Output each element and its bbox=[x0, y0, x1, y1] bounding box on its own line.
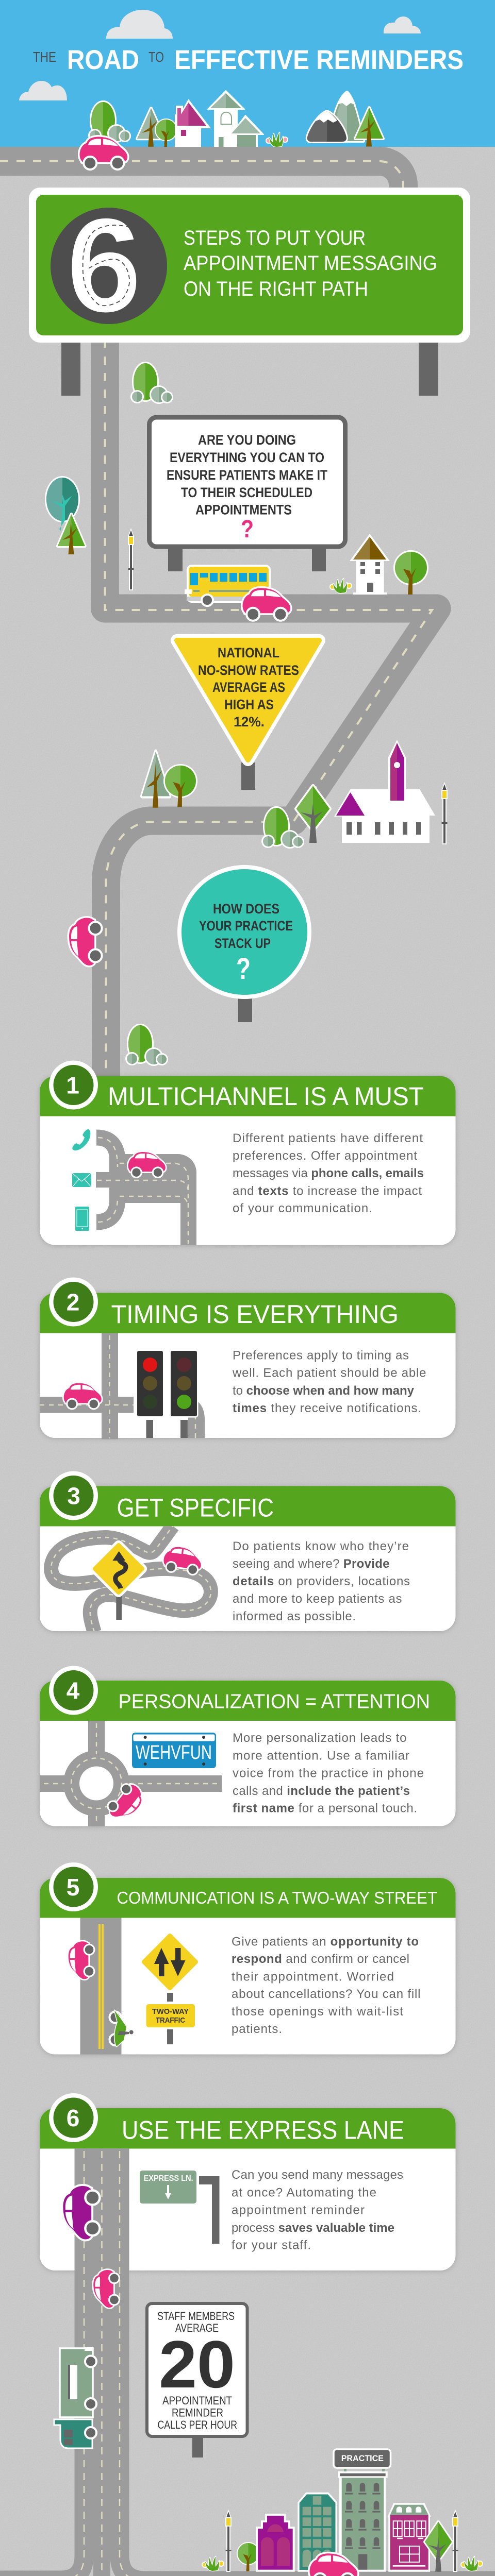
body text: respond and confirm or cancel bbox=[232, 1952, 409, 1966]
icon: mobile phone bbox=[75, 1207, 89, 1231]
speed sign: staff members average 20: 20 bbox=[159, 2327, 235, 2402]
mountains bbox=[307, 92, 364, 142]
two-way traffic sign bbox=[144, 1936, 196, 2044]
town scene bbox=[202, 2449, 483, 2572]
heading: TIMING IS EVERYTHING bbox=[111, 1300, 399, 1329]
pink car bbox=[69, 1941, 94, 1979]
title: TO bbox=[148, 49, 164, 65]
express lane sign bbox=[140, 2171, 220, 2244]
title bbox=[33, 45, 464, 75]
shrubs bbox=[127, 1025, 167, 1064]
trees near yield sign bbox=[142, 752, 329, 847]
street lamp bbox=[128, 529, 134, 590]
white house bbox=[208, 91, 263, 147]
billboard question bbox=[150, 417, 345, 571]
body text: Preferences apply to timing as bbox=[233, 1349, 409, 1362]
body text: voice from the practice in phone bbox=[233, 1766, 424, 1781]
body text: calls and include the patient’s bbox=[233, 1784, 410, 1798]
body text: informed as possible. bbox=[233, 1609, 356, 1623]
body text bbox=[232, 1935, 421, 2036]
body text: preferences. Offer appointment bbox=[233, 1149, 417, 1163]
pink car by bus bbox=[243, 588, 290, 621]
badge 1 bbox=[49, 1060, 98, 1110]
express roads and final road bbox=[0, 2148, 495, 2576]
license plate bbox=[132, 1733, 216, 1768]
badge 2 bbox=[49, 1278, 98, 1326]
traffic light: green bbox=[171, 1351, 197, 1438]
badge 4: 4 bbox=[67, 1677, 80, 1704]
purple building bbox=[256, 2514, 295, 2572]
lamp bbox=[441, 783, 448, 844]
badge 3: 3 bbox=[67, 1483, 80, 1510]
license plate: WEHVFUN bbox=[136, 1742, 212, 1764]
body text bbox=[232, 1349, 426, 1415]
body text bbox=[233, 1539, 410, 1623]
title: THE bbox=[33, 49, 56, 65]
body text bbox=[232, 2168, 403, 2252]
body text: patients. bbox=[232, 2022, 282, 2036]
plant bbox=[330, 579, 352, 593]
speed sign: staff members average 20: REMINDER bbox=[172, 2406, 223, 2419]
badge 6 bbox=[49, 2093, 98, 2142]
motorbike bbox=[109, 2010, 134, 2046]
billboard question: ? bbox=[241, 516, 254, 543]
two-way traffic sign: TRAFFIC bbox=[156, 2016, 185, 2025]
body text: for your staff. bbox=[232, 2238, 311, 2252]
teal tree bbox=[46, 478, 78, 531]
body text: seeing and where? Provide bbox=[233, 1557, 390, 1571]
heading: GET SPECIFIC bbox=[117, 1493, 274, 1522]
circle sign: how does your practice stack up: YOUR PRACTICE bbox=[199, 918, 293, 934]
circle sign: how does your practice stack up: HOW DOES bbox=[213, 901, 279, 917]
body text: process saves valuable time bbox=[232, 2221, 394, 2235]
pink car bbox=[64, 1383, 102, 1409]
icon: phone bbox=[72, 1129, 90, 1150]
pink car bbox=[128, 1152, 166, 1177]
badge 3 bbox=[49, 1471, 98, 1520]
green triangle tree bbox=[58, 514, 85, 554]
yield sign: AVERAGE AS bbox=[212, 680, 285, 695]
body text: Do patients know who they’re bbox=[233, 1539, 409, 1553]
pink car on vertical road bbox=[69, 918, 102, 965]
badge 5 bbox=[49, 1862, 98, 1911]
pink car bbox=[162, 1546, 203, 1575]
icon: email bbox=[72, 1173, 91, 1187]
intersection roads bbox=[40, 1333, 196, 1439]
billboard question: APPOINTMENTS bbox=[195, 502, 292, 517]
badge 2: 2 bbox=[67, 1289, 79, 1316]
panel: step 1 multichannel bbox=[40, 1060, 456, 1245]
billboard question: ENSURE PATIENTS MAKE IT bbox=[167, 467, 327, 483]
body text: More personalization leads to bbox=[233, 1731, 406, 1745]
traffic light: red bbox=[137, 1351, 163, 1438]
sign headline: STEPS TO PUT YOUR bbox=[184, 227, 366, 249]
teal building bbox=[298, 2493, 337, 2572]
heading: PERSONALIZATION = ATTENTION bbox=[119, 1691, 430, 1713]
body text: and texts to increase the impact bbox=[233, 1184, 422, 1198]
title: EFFECTIVE REMINDERS bbox=[174, 45, 464, 75]
speed sign: staff members average 20: APPOINTMENT bbox=[162, 2394, 232, 2407]
title: ROAD bbox=[67, 45, 139, 75]
clouds bbox=[19, 10, 421, 100]
billboard question: TO THEIR SCHEDULED bbox=[181, 485, 312, 500]
truck bbox=[54, 2347, 96, 2448]
pink car bbox=[93, 2270, 119, 2308]
body text: about cancellations? You can fill bbox=[232, 1987, 421, 2001]
badge 5: 5 bbox=[67, 1874, 79, 1901]
yield sign: HIGH AS bbox=[224, 697, 274, 712]
sign headline: APPOINTMENT MESSAGING bbox=[184, 252, 437, 275]
church bbox=[334, 740, 435, 843]
panel: step 6 express lane bbox=[40, 2093, 456, 2270]
body text: details on providers, locations bbox=[233, 1574, 410, 1588]
yield sign: NO-SHOW RATES bbox=[198, 663, 299, 678]
circle sign: how does your practice stack up: STACK UP bbox=[214, 936, 271, 951]
practice sign: PRACTICE bbox=[341, 2453, 384, 2463]
body text: their appointment. Worried bbox=[232, 1970, 394, 1984]
panel: step 5 two-way street bbox=[40, 1862, 456, 2055]
circle sign: how does your practice stack up: ? bbox=[236, 952, 251, 986]
body text: those openings with wait-list bbox=[232, 2005, 403, 2019]
body text: well. Each patient should be able bbox=[232, 1366, 426, 1380]
sign headline: ON THE RIGHT PATH bbox=[184, 278, 368, 300]
heading: USE THE EXPRESS LANE bbox=[122, 2115, 404, 2144]
round tree bbox=[395, 552, 427, 595]
heading: MULTICHANNEL IS A MUST bbox=[108, 1082, 424, 1111]
pink car bbox=[104, 1780, 147, 1825]
pink car on top road bbox=[80, 137, 127, 170]
number six badge bbox=[51, 191, 167, 340]
billboard question: ARE YOU DOING bbox=[198, 432, 296, 448]
body text: Give patients an opportunity to bbox=[232, 1935, 419, 1948]
two-way road bbox=[80, 1918, 122, 2055]
sign headline bbox=[184, 227, 437, 300]
body text: Can you send many messages bbox=[232, 2168, 403, 2182]
heading: COMMUNICATION IS A TWO-WAY STREET bbox=[117, 1888, 437, 1907]
body text: messages via phone calls, emails bbox=[233, 1166, 424, 1180]
body text: first name for a personal touch. bbox=[233, 1801, 417, 1816]
speed sign: staff members average 20: AVERAGE bbox=[175, 2321, 219, 2334]
practice tower bbox=[334, 2449, 391, 2572]
body text bbox=[233, 1131, 424, 1215]
road: top bbox=[0, 161, 403, 196]
yield sign bbox=[177, 640, 319, 790]
roundabout bbox=[40, 1721, 222, 1826]
billboard question: EVERYTHING YOU CAN TO bbox=[170, 450, 324, 465]
badge 1: 1 bbox=[66, 1072, 79, 1099]
body text: Different patients have different bbox=[233, 1131, 423, 1145]
badge 6: 6 bbox=[67, 2105, 79, 2131]
body text: more attention. Use a familiar bbox=[233, 1749, 409, 1763]
winding road bbox=[51, 1526, 211, 1632]
badge 4 bbox=[49, 1666, 98, 1715]
purple car bbox=[63, 2186, 100, 2240]
magenta building bbox=[388, 2503, 431, 2572]
main winding road bbox=[105, 340, 437, 1082]
body text: appointment reminder bbox=[232, 2203, 365, 2217]
school bus bbox=[185, 566, 270, 606]
speed sign: staff members average 20 bbox=[147, 2303, 248, 2458]
yield sign: NATIONAL bbox=[218, 645, 279, 660]
circle sign: how does your practice stack up bbox=[177, 865, 311, 1022]
panel: step 3 get specific bbox=[40, 1471, 456, 1632]
yield sign: 12%. bbox=[234, 714, 265, 730]
body text: and more to keep patients as bbox=[233, 1592, 402, 1606]
main green highway sign bbox=[29, 188, 470, 343]
sign posts bbox=[61, 340, 438, 396]
purple house bbox=[175, 100, 210, 147]
panel: step 2 timing bbox=[40, 1278, 456, 1439]
body text: at once? Automating the bbox=[232, 2185, 376, 2200]
body text: times they receive notifications. bbox=[233, 1401, 421, 1415]
shrubs under sign bbox=[132, 363, 172, 402]
speed sign: staff members average 20: STAFF MEMBERS bbox=[157, 2310, 235, 2323]
body text: of your communication. bbox=[233, 1201, 372, 1215]
express lane sign: EXPRESS LN. bbox=[144, 2174, 193, 2183]
speed sign: staff members average 20: CALLS PER HOUR bbox=[158, 2418, 237, 2431]
two-way traffic sign: TWO-WAY bbox=[152, 2007, 189, 2016]
body text: to choose when and how many bbox=[233, 1384, 415, 1398]
white tower house bbox=[350, 534, 390, 595]
body text bbox=[233, 1731, 424, 1816]
channel roads illustration bbox=[96, 1138, 196, 1245]
top scenery: trees, houses, mountains bbox=[90, 91, 383, 147]
pink car in town bbox=[310, 2553, 357, 2576]
curve warning sign bbox=[95, 1545, 142, 1620]
number six badge: 6 bbox=[67, 191, 141, 340]
panel: step 4 personalization bbox=[40, 1666, 456, 1826]
practice sign bbox=[334, 2449, 391, 2468]
